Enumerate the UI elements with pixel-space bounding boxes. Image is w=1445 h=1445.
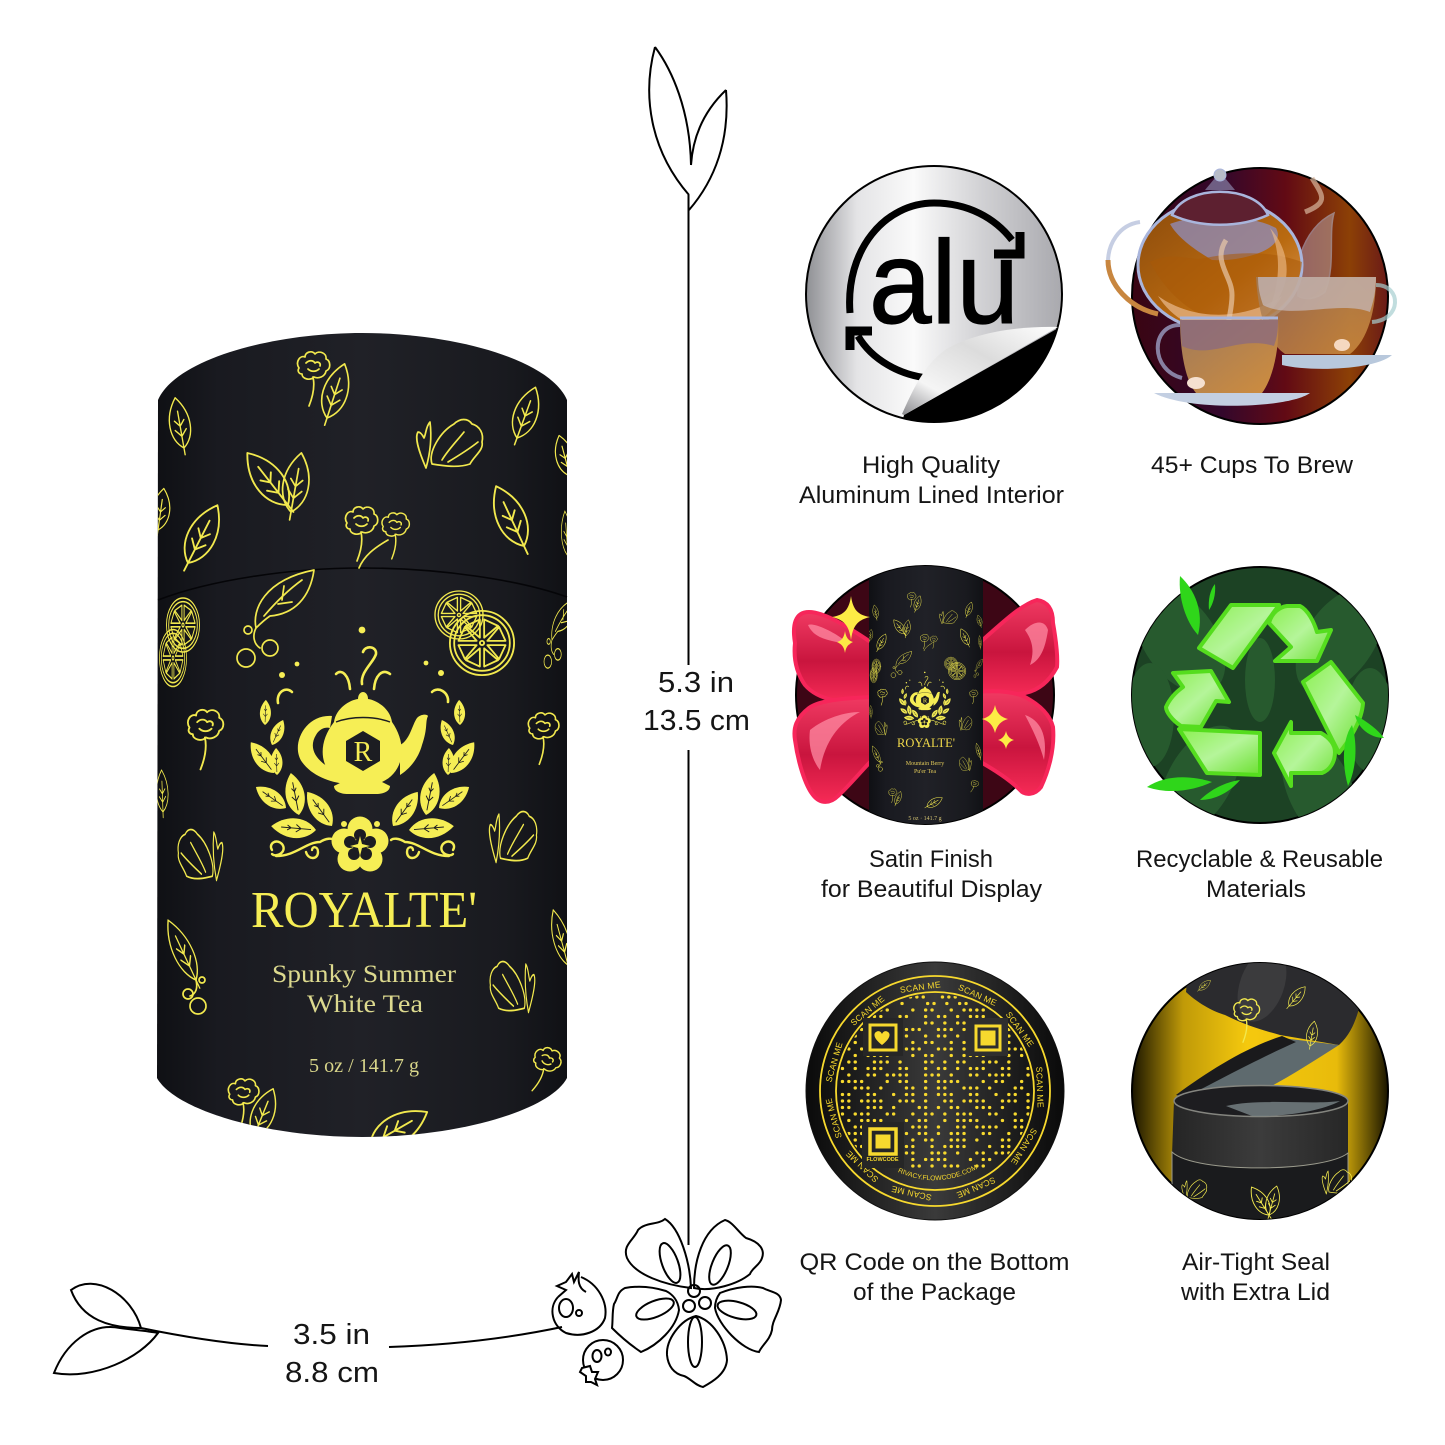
label: [800, 1249, 1070, 1306]
sprig: [54, 1284, 268, 1374]
height label: 5.3 in: [658, 667, 734, 699]
width measure: sprig and berries: [54, 1272, 623, 1385]
bow highlights: [808, 622, 1048, 770]
mini tin: 5 oz · 141.7 g: [908, 816, 942, 822]
bow lobes: [794, 600, 1057, 802]
scan me ring: SCAN ME: [844, 1149, 880, 1184]
QR finder squares: [862, 1018, 1008, 1168]
top leaves: [649, 47, 727, 210]
height measure: stem with leaves and flower: [612, 47, 781, 1387]
sparkles: [832, 596, 1014, 749]
label: [799, 452, 1064, 509]
scan me ring: SCAN ME: [890, 1184, 933, 1203]
label: Aluminum Lined Interior: [799, 482, 1064, 509]
icon: alu badge: [806, 166, 1070, 430]
tea name: Spunky Summer: [272, 961, 457, 988]
label: [1136, 846, 1383, 903]
label: High Quality: [862, 452, 1000, 479]
feature: aluminum lined: [799, 166, 1070, 509]
label: QR Code on the Bottom: [800, 1249, 1070, 1276]
scan me ring: SCAN ME: [1009, 1126, 1039, 1167]
width label: 8.8 cm: [285, 1357, 379, 1389]
scan me ring: SCAN ME: [824, 1041, 845, 1083]
wreath left: [244, 700, 339, 858]
icon: ribbon bow and mini tin: [794, 560, 1057, 830]
teapot: [298, 692, 428, 794]
lid and knob: [1172, 192, 1268, 225]
scan me ring: SCAN ME: [1034, 1067, 1046, 1108]
label: Satin Finish: [869, 846, 993, 873]
pot body: [1138, 199, 1302, 331]
blueberries: [552, 1272, 623, 1385]
QR finder squares: FLOWCODE: [866, 1157, 899, 1163]
QR dot matrix: [836, 997, 1034, 1166]
spout: [1298, 213, 1334, 299]
width label: 3.5 in: [293, 1319, 370, 1351]
scan me ring: [823, 979, 1046, 1203]
handle: [1108, 222, 1140, 262]
scan me ring: SCAN ME: [1004, 1010, 1036, 1049]
height label: 13.5 cm: [643, 705, 750, 737]
label: Recyclable & Reusable: [1136, 846, 1383, 873]
scan me ring: SCAN ME: [957, 982, 999, 1008]
label: [1180, 1249, 1330, 1306]
tea name: [272, 961, 457, 1018]
bright leaves: [1147, 576, 1384, 800]
product tin: [148, 333, 580, 1162]
feature: satin finish: [794, 560, 1057, 903]
back cup: [1256, 277, 1376, 354]
monogram badge: [346, 731, 380, 771]
icon: tin opening with lid: [1132, 942, 1388, 1225]
feature: 45+ cups: [1108, 168, 1395, 479]
gold botanical pattern: [148, 352, 580, 1162]
base motifs: [1182, 1170, 1352, 1222]
scan me ring: SCAN ME: [899, 979, 942, 995]
icon: glass teapot and cups: [1108, 168, 1395, 424]
lid rim: [1176, 1038, 1339, 1096]
icon: QR code disc: PRIVACY.FLOWCODE.COM: [898, 1164, 977, 1180]
icon: QR code disc: [806, 962, 1064, 1220]
recycle arrows: [1166, 605, 1363, 786]
privacy link text: [896, 1170, 975, 1180]
logo: teapot and wreath: [244, 627, 481, 872]
wreath flower: [332, 816, 388, 872]
lid motifs: [1195, 978, 1320, 1050]
mini tin: [867, 560, 984, 830]
feature: air-tight seal: [1132, 942, 1388, 1306]
scan me ring: SCAN ME: [955, 1175, 997, 1200]
width line: [389, 1327, 562, 1347]
icon: recycle symbol on leaves: [1131, 566, 1389, 824]
brand name: ROYALTE': [251, 882, 477, 939]
mini tin: ROYALTE': [897, 735, 955, 750]
feature: QR code: [800, 962, 1070, 1306]
steam: [278, 627, 448, 703]
width label: [285, 1319, 379, 1389]
steam: [1221, 240, 1232, 330]
lid: [1186, 963, 1358, 1045]
wreath right: [386, 700, 481, 858]
label: Materials: [1206, 876, 1306, 903]
monogram badge: R: [354, 737, 373, 768]
base tin: [1172, 1102, 1348, 1168]
tea name: White Tea: [307, 991, 423, 1018]
label: for Beautiful Display: [821, 876, 1042, 903]
flower: [612, 1219, 781, 1387]
lid seam: [158, 568, 567, 600]
feature: recyclable: [1131, 566, 1389, 897]
label: 45+ Cups To Brew: [1151, 452, 1354, 479]
label: of the Package: [853, 1279, 1016, 1306]
label: [821, 846, 1042, 903]
scan me ring: SCAN ME: [823, 1097, 844, 1139]
mini tin: Pu'er Tea: [914, 769, 936, 775]
icon: alu badge: alu: [869, 217, 1019, 349]
net weight: 5 oz / 141.7 g: [309, 1055, 419, 1077]
front cup: [1180, 320, 1278, 393]
height label: [643, 667, 750, 737]
scan me ring: SCAN ME: [848, 993, 887, 1028]
label: with Extra Lid: [1180, 1279, 1330, 1306]
tin body: [157, 333, 567, 1137]
label: Air-Tight Seal: [1182, 1249, 1330, 1276]
mini tin: Mountain Berry: [906, 761, 944, 767]
stem: [688, 195, 690, 1245]
